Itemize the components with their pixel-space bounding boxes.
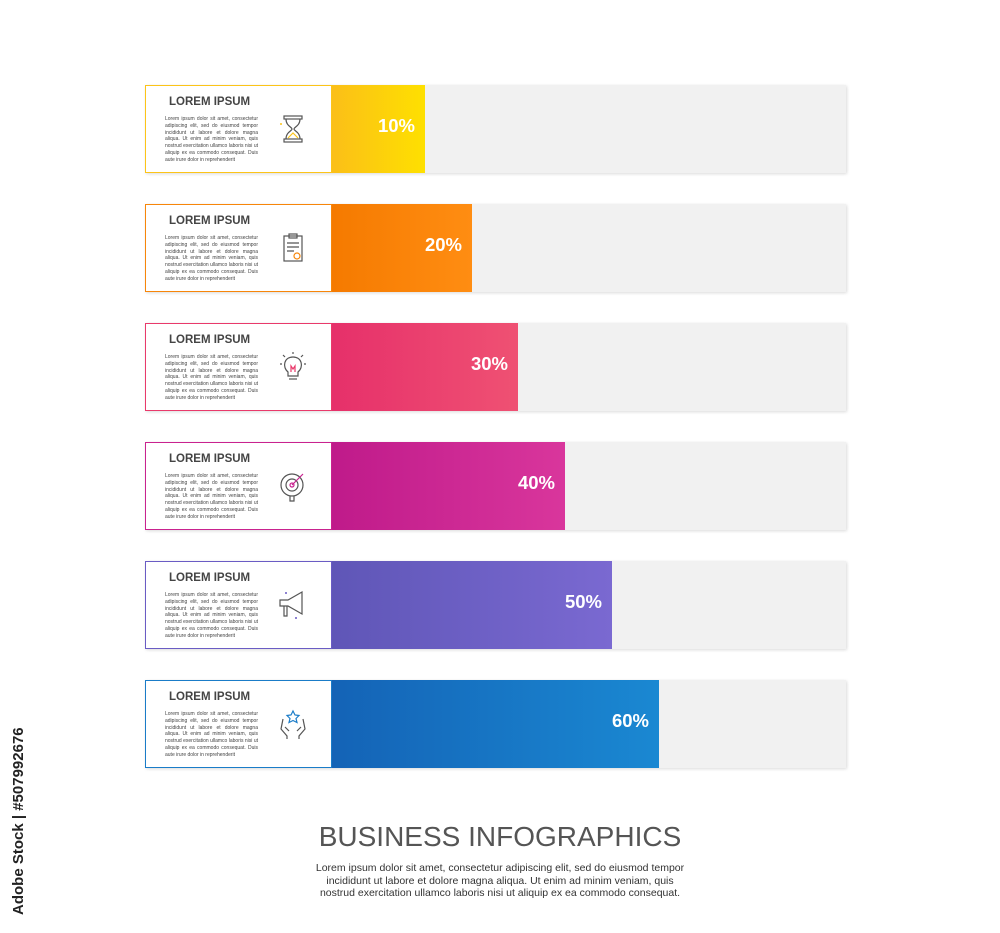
bar 2 (332, 204, 472, 292)
card 6: Lorem ipsum dolor sit amet, consectetur adipiscing elit, sed do eiusmod tempor incididunt ut labore et dolore magna aliqua. Ut enim ad minim veniam, quis nostrud exercitation ullamco laboris nisi ut aliquip ex ea commodo consequat. Duis aute irure dolor in reprehenderit (165, 711, 258, 758)
watermark: vertical stock id: Adobe Stock | #507992676 (10, 727, 27, 915)
row 4: 40% (145, 442, 848, 532)
bar 1: 10% (378, 115, 415, 136)
row 3: 30% (145, 323, 848, 413)
icon: light bulb (280, 352, 306, 380)
bar 4: 40% (518, 472, 555, 493)
card 6 (145, 680, 332, 768)
bar 5: 50% (565, 591, 602, 612)
bar 3: 30% (471, 353, 508, 374)
row 6: 60% (145, 680, 848, 770)
title: BUSINESS INFOGRAPHICS (319, 821, 681, 852)
card 5 (145, 561, 332, 649)
card 3: Lorem ipsum dolor sit amet, consectetur adipiscing elit, sed do eiusmod tempor incididunt ut labore et dolore magna aliqua. Ut enim ad minim veniam, quis nostrud exercitation ullamco laboris nisi ut aliquip ex ea commodo consequat. Duis aute irure dolor in reprehenderit (165, 354, 258, 401)
bar 3 (332, 323, 518, 411)
row 5: 50% (145, 561, 848, 651)
card 4: LOREM IPSUM (169, 453, 250, 465)
icon: hourglass (280, 115, 303, 143)
card 5: Lorem ipsum dolor sit amet, consectetur adipiscing elit, sed do eiusmod tempor incididunt ut labore et dolore magna aliqua. Ut enim ad minim veniam, quis nostrud exercitation ullamco laboris nisi ut aliquip ex ea commodo consequat. Duis aute irure dolor in reprehenderit (165, 592, 258, 639)
card 1 (145, 85, 332, 173)
bar 5 (332, 561, 612, 649)
icon: clipboard (283, 233, 303, 262)
icon: hands with star (280, 710, 306, 739)
card 2: LOREM IPSUM (169, 215, 250, 227)
card 3 (145, 323, 332, 411)
card 4 (145, 442, 332, 530)
card 5: LOREM IPSUM (169, 572, 250, 584)
row 2: 20% (145, 204, 848, 294)
card 3: LOREM IPSUM (169, 334, 250, 346)
bar 1 (332, 85, 425, 173)
description text: Lorem ipsum dolor sit amet, consectetur adipiscing elit, sed do eiusmod tempor incididunt ut labore et dolore magna aliqua. Ut enim ad minim veniam, quis nostrud exercitation ullamco laboris nisi ut aliquip ex ea commodo consequat. (316, 862, 684, 899)
card 2: Lorem ipsum dolor sit amet, consectetur adipiscing elit, sed do eiusmod tempor incididunt ut labore et dolore magna aliqua. Ut enim ad minim veniam, quis nostrud exercitation ullamco laboris nisi ut aliquip ex ea commodo consequat. Duis aute irure dolor in reprehenderit (165, 235, 258, 282)
card 1: Lorem ipsum dolor sit amet, consectetur adipiscing elit, sed do eiusmod tempor incididunt ut labore et dolore magna aliqua. Ut enim ad minim veniam, quis nostrud exercitation ullamco laboris nisi ut aliquip ex ea commodo consequat. Duis aute irure dolor in reprehenderit (165, 116, 258, 163)
card 1: LOREM IPSUM (169, 96, 250, 108)
card 2 (145, 204, 332, 292)
card 6: LOREM IPSUM (169, 691, 250, 703)
card 4: Lorem ipsum dolor sit amet, consectetur adipiscing elit, sed do eiusmod tempor incididunt ut labore et dolore magna aliqua. Ut enim ad minim veniam, quis nostrud exercitation ullamco laboris nisi ut aliquip ex ea commodo consequat. Duis aute irure dolor in reprehenderit (165, 473, 258, 520)
bar 6 (332, 680, 659, 768)
bar 6: 60% (612, 710, 649, 731)
bar 2: 20% (425, 234, 462, 255)
bar 4 (332, 442, 565, 530)
icon: target (280, 473, 304, 502)
row 1: 10% (145, 85, 848, 175)
icon: megaphone (279, 591, 303, 619)
